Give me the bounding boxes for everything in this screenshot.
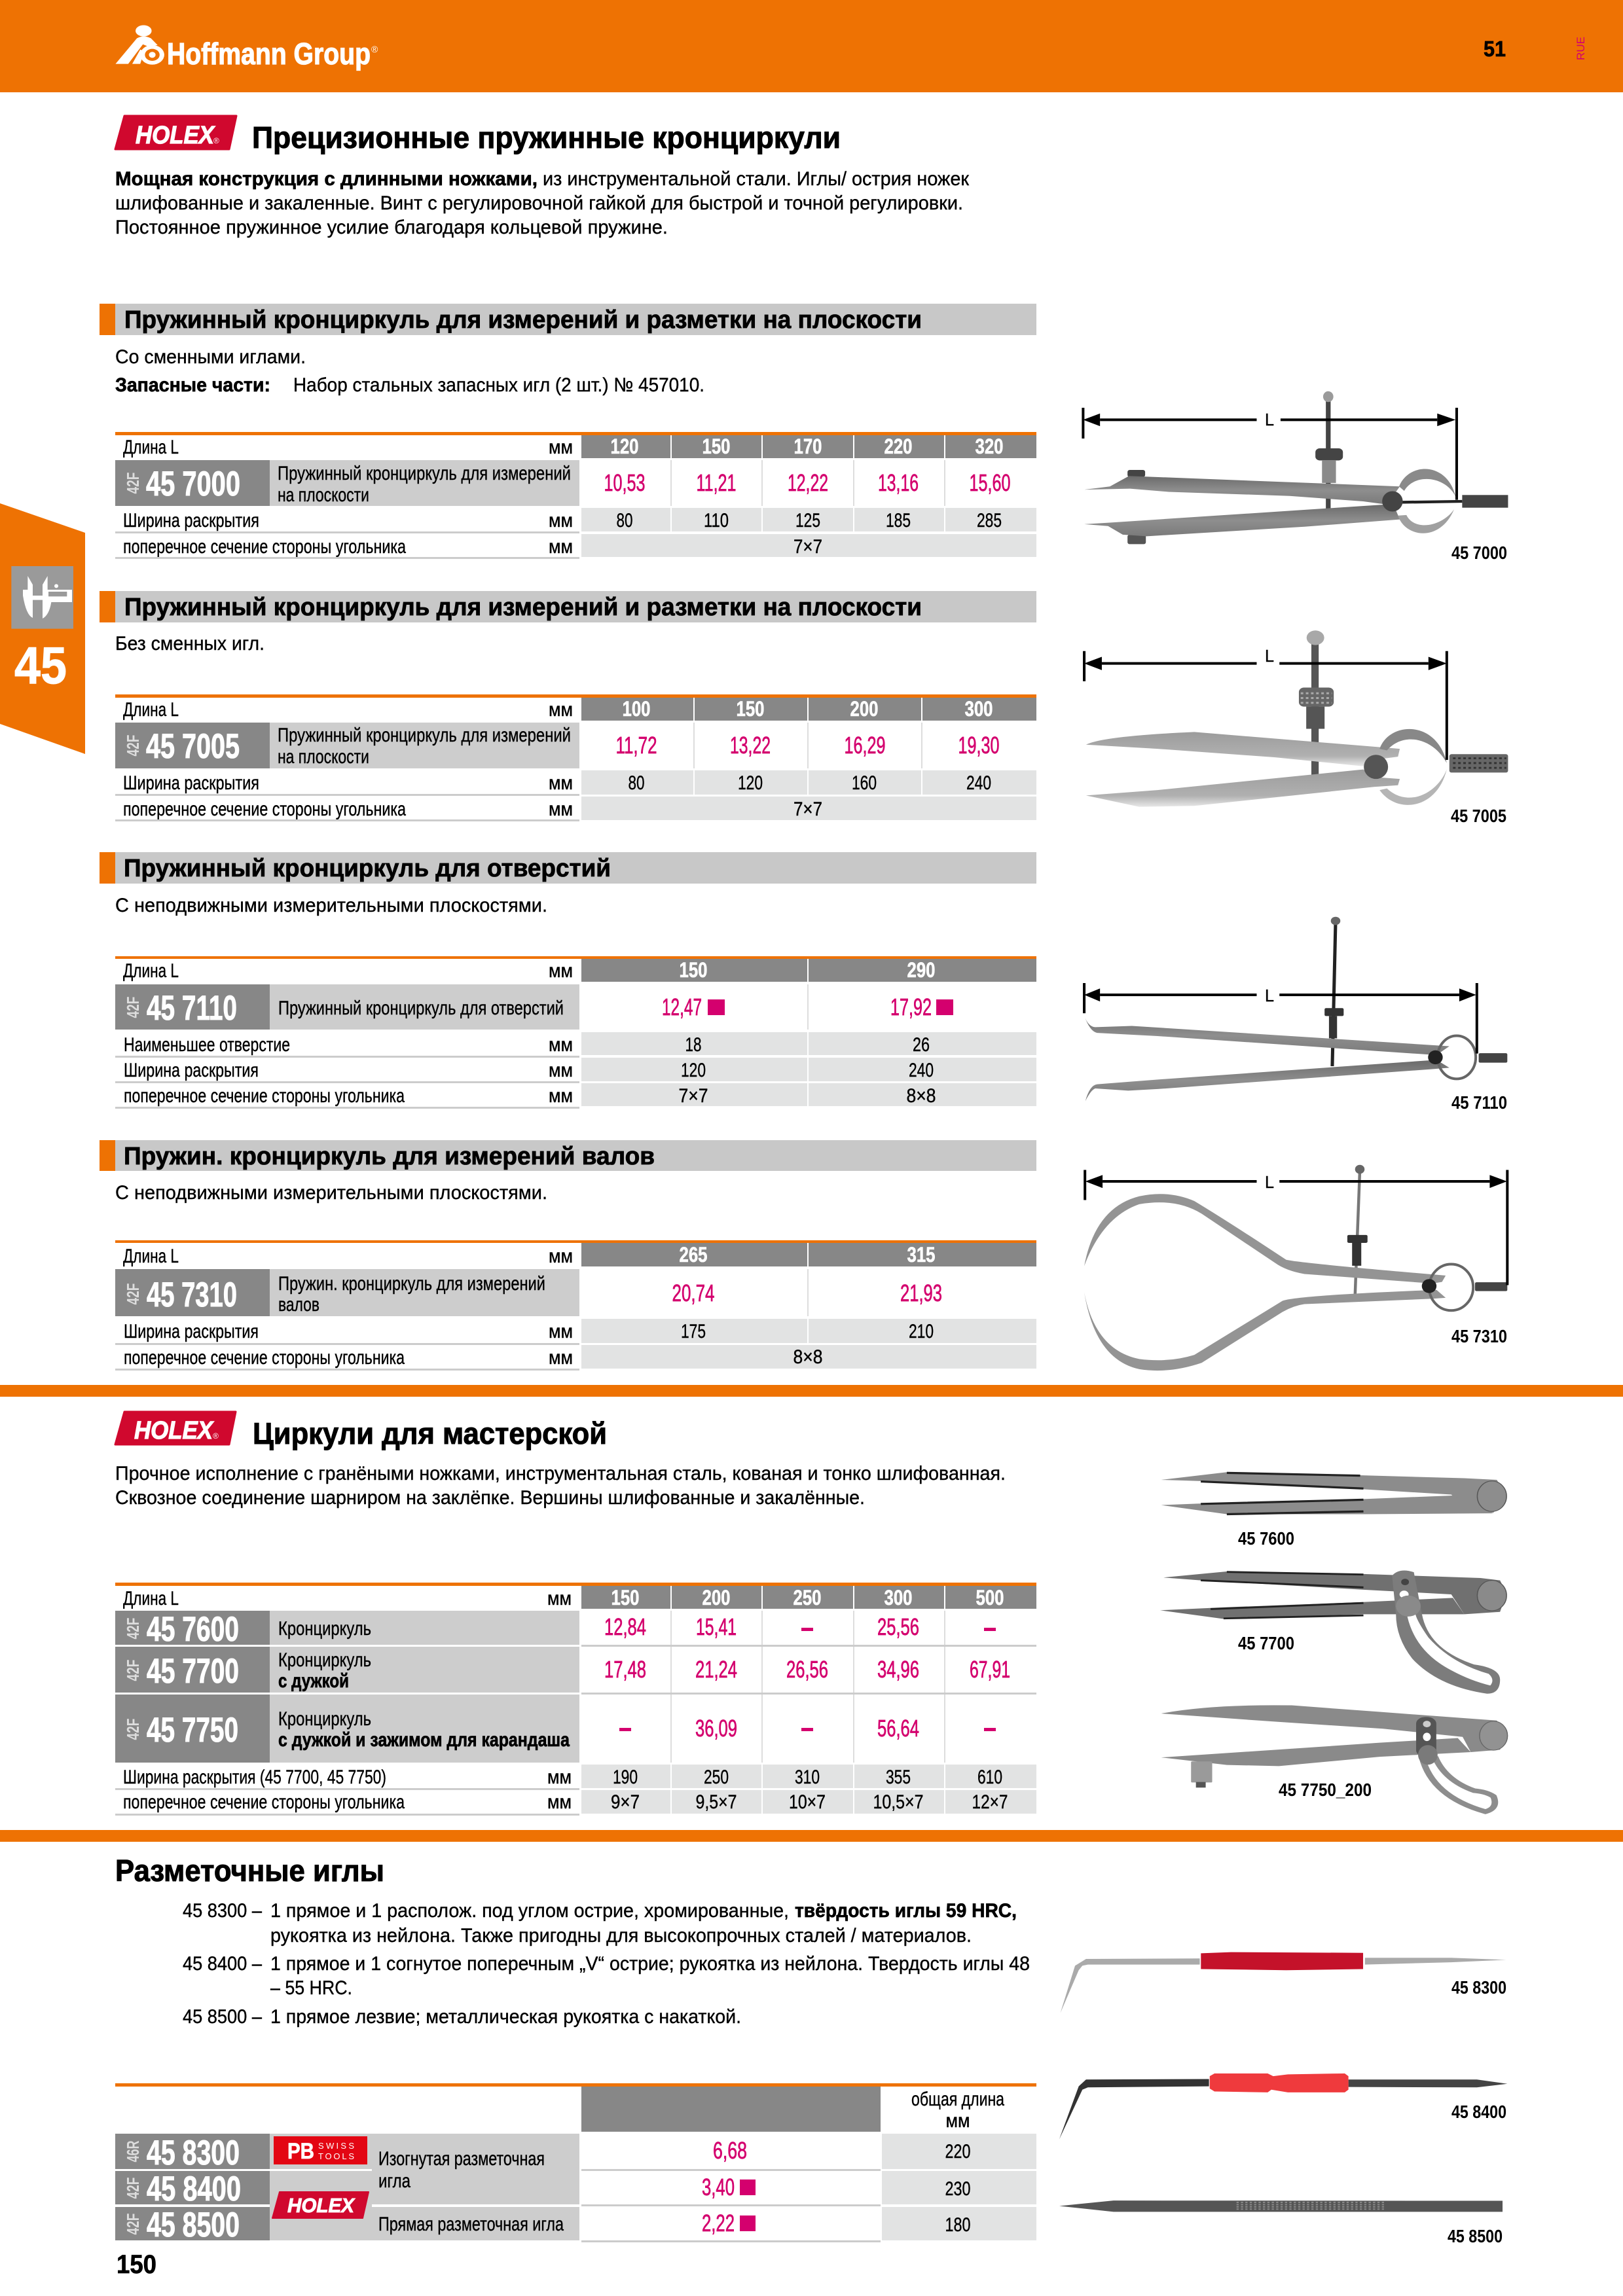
item row 45 7750: 42F bbox=[123, 1719, 143, 1740]
row: opening width bbox=[115, 1319, 1036, 1345]
item row 45 7600: 25,56 bbox=[877, 1613, 919, 1640]
item row 45 7310: валов bbox=[278, 1294, 319, 1316]
row: smallest bore: Наименьшее отверстие bbox=[124, 1034, 290, 1056]
logo: HOLEX top: HOLEX bbox=[136, 122, 215, 149]
product image: caliper 45 7005: 45 7005 bbox=[1451, 806, 1506, 826]
row: cross section: 10×7 bbox=[789, 1791, 826, 1813]
header row: 500 bbox=[976, 1586, 1004, 1609]
footer page number: 150 bbox=[117, 2250, 156, 2279]
logo: PB Swiss Tools bbox=[274, 2136, 367, 2164]
item row 45 7600: 42F bbox=[123, 1618, 143, 1639]
item row 45 7750: 36,09 bbox=[695, 1715, 737, 1742]
description block: Прямая разметочная игла bbox=[378, 2214, 564, 2235]
header row: 290 bbox=[907, 958, 935, 982]
header row: 320 bbox=[976, 435, 1003, 458]
header row: 150 bbox=[680, 958, 707, 982]
item row 45 7310: 20,74 bbox=[672, 1280, 715, 1306]
table 45 7110 bbox=[115, 956, 1036, 1109]
item row 45 7000: 42F bbox=[123, 473, 143, 493]
row: opening width: Ширина раскрытия bbox=[124, 1060, 259, 1081]
row: cross section: 9,5×7 bbox=[695, 1791, 737, 1813]
header band bbox=[0, 0, 1623, 92]
item row 45 7700: с дужкой bbox=[278, 1670, 349, 1692]
item row 45 7005: 11,72 bbox=[615, 732, 657, 759]
page number: 51 bbox=[1484, 37, 1506, 61]
section note 45 7000 bbox=[115, 346, 704, 396]
logo: HOLEX table: HOLEX bbox=[287, 2194, 356, 2217]
intro text: Постоянное пружинное усилие благодаря кольцевой пружине. bbox=[115, 217, 668, 238]
product image: divider 45 7600 bbox=[1161, 1472, 1506, 1549]
item row 45 7310 bbox=[115, 1269, 942, 1316]
header row: Длина L bbox=[123, 960, 179, 982]
product image: caliper 45 7000: L bbox=[1265, 410, 1274, 429]
logo: Hoffmann Group bbox=[115, 25, 378, 71]
header row bbox=[123, 1243, 1036, 1267]
title: scribers: Разметочные иглы bbox=[115, 1854, 384, 1888]
logo: HOLEX top: ® bbox=[213, 136, 219, 145]
row: opening width: 210 bbox=[909, 1321, 934, 1342]
row: opening width: 185 bbox=[886, 510, 911, 531]
item row 45 7000: 11,21 bbox=[697, 469, 736, 496]
item row 45 7110: 12,47 bbox=[662, 994, 702, 1020]
row: cross section bbox=[115, 797, 1036, 821]
item row 45 7310: 45 7310 bbox=[147, 1276, 237, 1314]
product image: scriber 45 8400 bbox=[1059, 2073, 1507, 2140]
product image: divider 45 7750: 45 7750_200 bbox=[1279, 1780, 1372, 1800]
description block: Изогнутая разметочная bbox=[378, 2148, 545, 2170]
item row 45 7750: Кронциркуль bbox=[278, 1708, 371, 1730]
item row 45 7600: 45 7600 bbox=[147, 1610, 239, 1649]
intro text workshop bbox=[115, 1463, 1006, 1509]
row: opening width: Ширина раскрытия bbox=[123, 772, 259, 794]
title: precision spring calipers: Прецизионные пружинные кронциркули bbox=[252, 120, 841, 154]
item row 45 8400: 45 8400 bbox=[147, 2170, 241, 2208]
item row 45 7750: с дужкой и зажимом для карандаша bbox=[278, 1729, 570, 1751]
intro text: Мощная конструкция с длинными ножками, bbox=[115, 168, 538, 190]
row: cross section: мм bbox=[547, 1791, 572, 1813]
divider band bbox=[0, 1830, 1623, 1842]
dimension L bbox=[1084, 651, 1447, 760]
row: smallest bore: 26 bbox=[913, 1034, 930, 1056]
header row: 150 bbox=[702, 435, 731, 458]
item row 45 8300 bbox=[115, 2134, 1036, 2172]
row: opening width: 250 bbox=[704, 1767, 729, 1788]
logo: HOLEX workshop bbox=[115, 1412, 236, 1444]
row: cross section: мм bbox=[549, 536, 573, 558]
row: opening width: 120 bbox=[738, 772, 763, 794]
scriber descriptions bbox=[183, 1900, 1030, 2028]
language code: RUE bbox=[1575, 37, 1587, 60]
row: opening width: 310 bbox=[795, 1767, 820, 1788]
row: opening width: мм bbox=[549, 1060, 573, 1081]
product image: scriber 45 8300 bbox=[1061, 1952, 1506, 2013]
section note 45 7005: Без сменных игл. bbox=[115, 633, 264, 655]
item row 45 8500 bbox=[115, 2206, 1036, 2244]
item row 45 7000: 45 7000 bbox=[146, 465, 240, 503]
description block: игла bbox=[378, 2170, 410, 2192]
product image: caliper 45 7110: L bbox=[1265, 986, 1274, 1005]
item row 45 7110: 42F bbox=[123, 996, 143, 1018]
row: cross section: поперечное сечение стороны угольника bbox=[123, 536, 406, 558]
item row 45 7310: Пружин. кронциркуль для измерений bbox=[278, 1273, 545, 1295]
header row bbox=[123, 958, 1036, 982]
row: opening width: Ширина раскрытия bbox=[124, 1321, 259, 1342]
logo: Hoffmann Group: ® bbox=[371, 44, 378, 54]
row: cross section: 8×8 bbox=[793, 1346, 822, 1368]
table 45 76xx bbox=[115, 1583, 1036, 1816]
logo: Hoffmann Group: Hoffmann Group bbox=[167, 37, 371, 71]
product image: caliper 45 7310: 45 7310 bbox=[1451, 1326, 1507, 1346]
row: opening width: мм bbox=[549, 1321, 573, 1342]
row: cross section bbox=[115, 1083, 1036, 1109]
item row 45 8300: 46R bbox=[123, 2140, 143, 2162]
row: opening width bbox=[115, 1058, 1036, 1083]
table 45 7310 bbox=[115, 1240, 1036, 1371]
item row 45 7700: 21,24 bbox=[695, 1656, 737, 1683]
row: opening width: 610 bbox=[977, 1767, 1002, 1788]
item row 45 8400 bbox=[115, 2170, 1036, 2208]
header row: 315 bbox=[907, 1243, 935, 1266]
header row: мм bbox=[945, 2110, 970, 2132]
item row 45 8400: 230 bbox=[945, 2178, 970, 2200]
item row 45 7000: Пружинный кронциркуль для измерений bbox=[278, 463, 571, 484]
row: opening width: мм bbox=[547, 1767, 572, 1788]
item row 45 7310: 42F bbox=[123, 1283, 143, 1305]
product image: divider 45 7750 bbox=[1161, 1705, 1508, 1812]
item row 45 7750: 56,64 bbox=[877, 1715, 919, 1742]
row: opening width: 285 bbox=[977, 510, 1002, 531]
row: opening width: мм bbox=[549, 772, 573, 794]
header row: 250 bbox=[793, 1586, 821, 1609]
header row: 220 bbox=[884, 435, 913, 458]
dimension L bbox=[1084, 983, 1477, 1054]
product image: caliper 45 7110: 45 7110 bbox=[1451, 1092, 1507, 1113]
item row 45 8300: 45 8300 bbox=[147, 2134, 240, 2172]
product image: caliper 45 7000 bbox=[1083, 391, 1508, 563]
header row: 170 bbox=[793, 435, 822, 458]
item row 45 7005: 13,22 bbox=[730, 732, 771, 759]
logo: PB Swiss Tools: TOOLS bbox=[318, 2151, 354, 2161]
item row 45 7005: на плоскости bbox=[278, 746, 369, 768]
item row 45 7700: 67,91 bbox=[970, 1656, 1010, 1683]
table scribers bbox=[115, 2083, 1036, 2244]
row: cross section: поперечное сечение стороны угольника bbox=[123, 1791, 405, 1813]
header row: 120 bbox=[610, 435, 639, 458]
item row 45 8500: 42F bbox=[123, 2214, 143, 2234]
intro text workshop: Прочное исполнение с гранёными ножками, инструментальная сталь, кованая и тонко шлифованная. bbox=[115, 1463, 1006, 1484]
row: cross section bbox=[115, 534, 1036, 559]
row: cross section: поперечное сечение стороны угольника bbox=[124, 1347, 405, 1369]
item row 45 7110 bbox=[115, 984, 953, 1030]
item row 45 7750: 45 7750 bbox=[147, 1711, 238, 1749]
item row 45 7005: Пружинный кронциркуль для измерений bbox=[278, 725, 571, 746]
intro text: шлифованные и закаленные. Винт с регулировочной гайкой для быстрой и точной регулировки. bbox=[115, 192, 963, 214]
row: cross section: 12×7 bbox=[972, 1791, 1008, 1813]
item row 45 7600: 12,84 bbox=[604, 1613, 646, 1640]
header row: 150 bbox=[736, 697, 765, 721]
header row: общая длина bbox=[911, 2089, 1004, 2110]
row: cross section bbox=[115, 1345, 1036, 1371]
header row: 300 bbox=[965, 697, 993, 721]
scriber descriptions: 1 прямое лезвие; металлическая рукоятка с накаткой. bbox=[270, 2006, 741, 2028]
product image: caliper 45 7310 bbox=[1084, 1165, 1507, 1371]
scriber descriptions: твёрдость иглы 59 HRC, bbox=[795, 1900, 1017, 1922]
row: opening width: 80 bbox=[617, 510, 632, 531]
header row: мм bbox=[549, 699, 573, 721]
row: smallest bore: 18 bbox=[685, 1034, 702, 1056]
row: smallest bore: мм bbox=[549, 1034, 573, 1056]
header row bbox=[581, 2087, 1004, 2132]
header row: 300 bbox=[884, 1586, 913, 1609]
row: cross section bbox=[115, 1790, 1036, 1816]
item row 45 7000: 12,22 bbox=[788, 469, 828, 496]
product image: divider 45 7700 bbox=[1160, 1570, 1506, 1694]
item row 45 7310: 21,93 bbox=[900, 1280, 942, 1306]
product image: caliper 45 7005: L bbox=[1265, 646, 1274, 666]
row: cross section: поперечное сечение стороны угольника bbox=[123, 798, 406, 820]
header row: Длина L bbox=[123, 1588, 179, 1609]
item row 45 7700: Кронциркуль bbox=[278, 1649, 371, 1671]
item row 45 7005: 42F bbox=[123, 734, 143, 757]
row: cross section: поперечное сечение стороны угольника bbox=[124, 1085, 405, 1107]
item row 45 7005: 45 7005 bbox=[146, 727, 240, 766]
row: opening width: 110 bbox=[704, 510, 729, 531]
item row 45 8500: 180 bbox=[945, 2214, 970, 2236]
scriber descriptions: 45 8500 – bbox=[183, 2006, 262, 2028]
table 45 7005 bbox=[115, 694, 1036, 821]
row: cross section: 7×7 bbox=[793, 798, 822, 820]
item row 45 8500: 45 8500 bbox=[147, 2206, 240, 2244]
logo: HOLEX workshop: HOLEX bbox=[134, 1417, 214, 1444]
header row: мм bbox=[549, 1246, 573, 1267]
row: opening width: Ширина раскрытия (45 7700, 45 7750) bbox=[123, 1767, 386, 1788]
row: cross section: 9×7 bbox=[611, 1791, 640, 1813]
scriber descriptions: рукоятка из нейлона. Также пригодны для высокопрочных сталей / материалов. bbox=[270, 1925, 972, 1946]
section heading 45 7310 bbox=[100, 1140, 1036, 1171]
item row 45 8300: 6,68 bbox=[713, 2137, 747, 2164]
logo: HOLEX top bbox=[115, 116, 236, 149]
product image: scriber 45 8500 bbox=[1059, 2200, 1503, 2246]
header row: Длина L bbox=[123, 437, 179, 458]
item row 45 7005: 19,30 bbox=[958, 732, 999, 759]
row: opening width: 355 bbox=[886, 1767, 911, 1788]
chapter number: 45 bbox=[14, 636, 67, 694]
header row: Длина L bbox=[123, 699, 179, 721]
section note 45 7310: С неподвижными измерительными плоскостями. bbox=[115, 1182, 547, 1204]
table 45 7000 bbox=[115, 432, 1036, 559]
row: opening width: 175 bbox=[681, 1321, 706, 1342]
section note 45 7000: Набор стальных запасных игл (2 шт.) № 457010. bbox=[293, 374, 704, 396]
product image: divider 45 7700: 45 7700 bbox=[1238, 1633, 1294, 1653]
scriber descriptions: 45 8300 – bbox=[183, 1900, 262, 1922]
section note 45 7000: Запасные части: bbox=[115, 374, 270, 396]
item row 45 7600: Кронциркуль bbox=[278, 1618, 371, 1640]
item row 45 7110: 17,92 bbox=[890, 994, 932, 1020]
item row 45 7700: 17,48 bbox=[604, 1656, 646, 1683]
row: cross section: 10,5×7 bbox=[873, 1791, 923, 1813]
scriber descriptions: – 55 HRC. bbox=[270, 1977, 352, 1999]
header row: 100 bbox=[622, 697, 651, 721]
header row: мм bbox=[547, 1588, 572, 1609]
logo: PB Swiss Tools: PB bbox=[287, 2139, 314, 2164]
item row 45 7600: 15,41 bbox=[696, 1613, 737, 1640]
row: opening width: 120 bbox=[681, 1060, 706, 1081]
row: opening width bbox=[115, 508, 1036, 533]
item row 45 7110: Пружинный кронциркуль для отверстий bbox=[278, 997, 564, 1019]
item row 45 7700 bbox=[115, 1647, 1036, 1695]
product image: caliper 45 7310: L bbox=[1265, 1172, 1274, 1192]
row: opening width: 240 bbox=[909, 1060, 934, 1081]
logo: HOLEX workshop: ® bbox=[213, 1431, 219, 1441]
row: opening width bbox=[115, 1765, 1036, 1790]
item row 45 8300: 220 bbox=[945, 2141, 970, 2162]
header row: мм bbox=[549, 437, 573, 458]
row: smallest bore bbox=[115, 1032, 1036, 1058]
divider band bbox=[0, 1385, 1623, 1397]
item row 45 7700: 45 7700 bbox=[147, 1652, 239, 1691]
title: workshop dividers: Циркули для мастерской bbox=[253, 1416, 607, 1450]
logo: HOLEX table bbox=[272, 2192, 369, 2218]
header row bbox=[123, 1586, 1036, 1609]
item row 45 8400: 42F bbox=[123, 2177, 143, 2199]
row: opening width: 160 bbox=[852, 772, 877, 794]
section heading 45 7110 bbox=[100, 852, 1036, 884]
item row 45 7000: на плоскости bbox=[278, 484, 369, 506]
row: cross section: 7×7 bbox=[793, 536, 822, 558]
item row 45 8500: 2,22 bbox=[702, 2210, 735, 2236]
item row 45 7600 bbox=[115, 1610, 1036, 1649]
header row bbox=[123, 435, 1036, 458]
row: opening width: 80 bbox=[629, 772, 644, 794]
item row 45 7000 bbox=[115, 460, 1011, 506]
item row 45 7000: 15,60 bbox=[969, 469, 1011, 496]
row: opening width: 240 bbox=[966, 772, 991, 794]
icon: caliper bbox=[11, 566, 73, 629]
section heading 45 7005: Пружинный кронциркуль для измерений и разметки на плоскости bbox=[124, 594, 922, 621]
product image: scriber 45 8400: 45 8400 bbox=[1451, 2102, 1506, 2122]
item row 45 7110: 45 7110 bbox=[147, 989, 237, 1028]
product image: caliper 45 7005 bbox=[1084, 630, 1508, 826]
product image: scriber 45 8300: 45 8300 bbox=[1451, 1977, 1506, 1998]
header row: мм bbox=[549, 960, 573, 982]
product image: caliper 45 7000: 45 7000 bbox=[1451, 543, 1507, 563]
item row 45 7750 bbox=[115, 1695, 996, 1763]
section note 45 7000: Со сменными иглами. bbox=[115, 346, 306, 368]
header row: 265 bbox=[680, 1243, 707, 1266]
header row: 200 bbox=[702, 1586, 731, 1609]
intro text bbox=[115, 168, 970, 238]
intro text: из инструментальной стали. Иглы/ острия ножек bbox=[543, 168, 970, 190]
header row: 200 bbox=[850, 697, 879, 721]
scriber descriptions: 1 прямое и 1 располож. под углом острие, хромированные, bbox=[270, 1900, 789, 1922]
scriber descriptions: 1 прямое и 1 согнутое поперечным „V“ острие; рукоятка из нейлона. Твердость иглы 48 bbox=[270, 1953, 1030, 1975]
item row 45 7700: 42F bbox=[123, 1660, 143, 1681]
row: opening width: 125 bbox=[795, 510, 820, 531]
row: opening width: 190 bbox=[613, 1767, 638, 1788]
description block bbox=[270, 2134, 579, 2240]
item row 45 8400: 3,40 bbox=[702, 2174, 735, 2200]
header row: 150 bbox=[611, 1586, 639, 1609]
row: opening width: мм bbox=[549, 510, 573, 531]
row: cross section: 8×8 bbox=[906, 1085, 936, 1107]
item row 45 7005: 16,29 bbox=[845, 732, 885, 759]
product image: caliper 45 7110 bbox=[1084, 917, 1507, 1113]
intro text workshop: Сквозное соединение шарниром на заклёпке. Вершины шлифованные и закалённые. bbox=[115, 1487, 865, 1509]
chapter side tab bbox=[0, 503, 85, 754]
header row: Длина L bbox=[123, 1246, 179, 1267]
item row 45 7700: 34,96 bbox=[877, 1656, 919, 1683]
item row 45 7000: 10,53 bbox=[604, 469, 646, 496]
scriber descriptions: 45 8400 – bbox=[183, 1953, 262, 1975]
section heading 45 7000: Пружинный кронциркуль для измерений и разметки на плоскости bbox=[124, 306, 922, 334]
row: cross section: 7×7 bbox=[678, 1085, 708, 1107]
row: cross section: мм bbox=[549, 1347, 573, 1369]
item row 45 7700: 26,56 bbox=[786, 1656, 828, 1683]
logo: PB Swiss Tools: SWISS bbox=[318, 2141, 354, 2151]
section heading 45 7310: Пружин. кронциркуль для измерений валов bbox=[124, 1143, 655, 1170]
row: opening width: Ширина раскрытия bbox=[123, 510, 259, 531]
dimension L bbox=[1083, 408, 1457, 500]
product image: scriber 45 8500: 45 8500 bbox=[1448, 2226, 1503, 2246]
section heading 45 7110: Пружинный кронциркуль для отверстий bbox=[124, 855, 611, 882]
item row 45 7000: 13,16 bbox=[878, 469, 919, 496]
product image: divider 45 7600: 45 7600 bbox=[1238, 1528, 1294, 1549]
section note 45 7110: С неподвижными измерительными плоскостями. bbox=[115, 895, 547, 916]
header row bbox=[123, 697, 1036, 721]
row: cross section: мм bbox=[549, 798, 573, 820]
dimension L bbox=[1085, 1170, 1507, 1285]
row: cross section: мм bbox=[549, 1085, 573, 1107]
item row 45 7005 bbox=[115, 723, 999, 768]
row: opening width bbox=[115, 770, 1036, 796]
